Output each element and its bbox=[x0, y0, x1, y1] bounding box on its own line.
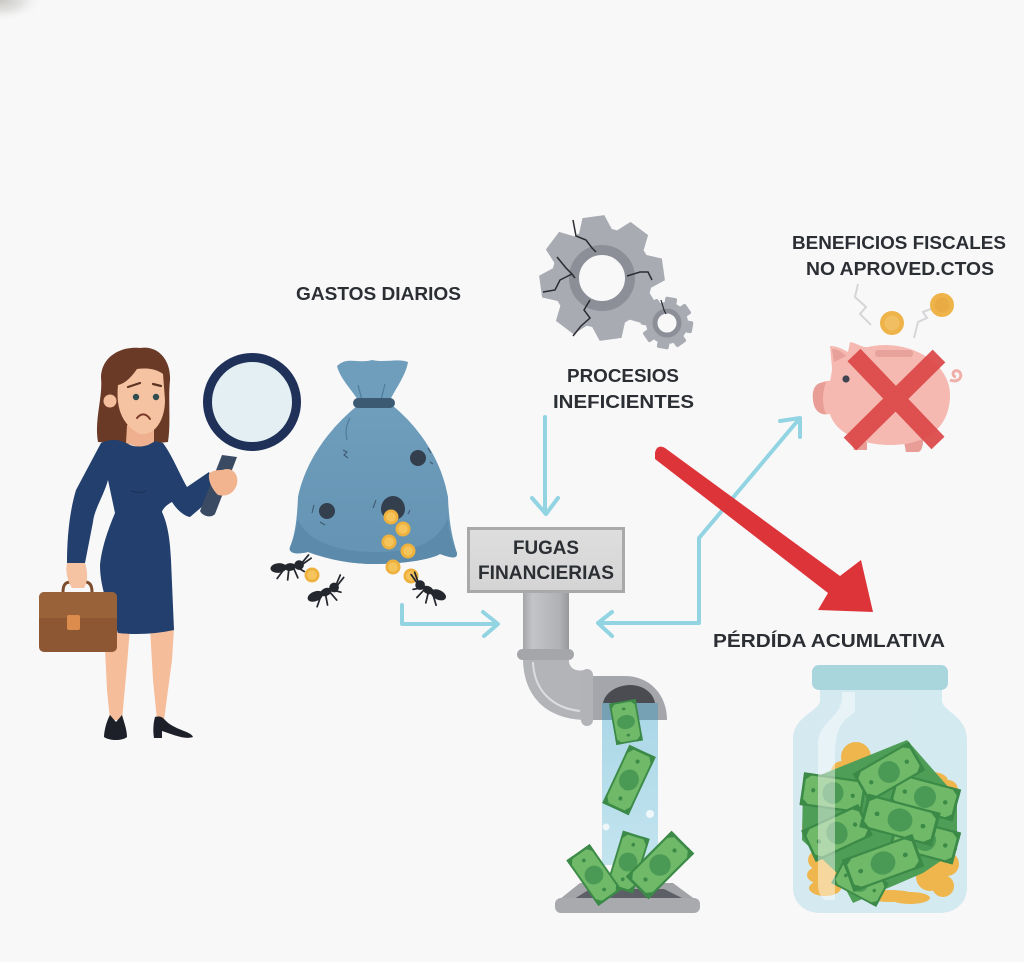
holes bbox=[319, 450, 426, 521]
glass highlight bbox=[818, 692, 855, 900]
hand on briefcase bbox=[66, 563, 87, 588]
icon: piggy bank crossed out bbox=[813, 284, 961, 452]
jar of money bbox=[793, 665, 967, 913]
red cross bbox=[850, 355, 939, 444]
sign: fugas financieras bbox=[468, 528, 624, 592]
hand on magnifier bbox=[209, 469, 237, 496]
woman with magnifying glass and briefcase bbox=[39, 348, 296, 740]
jar glass bbox=[793, 688, 967, 913]
bag body bbox=[290, 406, 457, 564]
shoes bbox=[104, 715, 127, 740]
neck bbox=[126, 425, 154, 448]
ear bbox=[104, 394, 116, 408]
bills in jar bbox=[800, 740, 961, 907]
blue arrow: gastos to pipe bbox=[402, 605, 498, 636]
label: perdida acumulativa: PÉRDÍDA ACUMLATIVA bbox=[713, 630, 945, 651]
icon: leaking money bag with ants bbox=[270, 360, 457, 611]
label: procesos ineficientes: INEFICIENTES bbox=[553, 391, 694, 412]
label: beneficios fiscales: NO APROVED.CTOS bbox=[806, 258, 994, 279]
hair bbox=[97, 348, 170, 445]
heading: gastos diarios: GASTOS DIARIOS bbox=[296, 284, 461, 304]
legs bbox=[104, 628, 174, 720]
dress bbox=[67, 440, 218, 634]
label: beneficios fiscales: BENEFICIOS FISCALES bbox=[792, 232, 1006, 253]
label: procesos ineficientes: PROCESIOS bbox=[567, 365, 679, 386]
drain grate bbox=[555, 883, 700, 913]
eyes and brows bbox=[128, 383, 161, 419]
coins in jar bbox=[802, 742, 959, 904]
large gear bbox=[532, 208, 672, 348]
sign: fugas financieras: FINANCIERIAS bbox=[478, 563, 614, 584]
falling bills bbox=[566, 699, 694, 906]
sign: fugas financieras: FUGAS bbox=[513, 538, 579, 559]
icon: cracked gears bbox=[532, 208, 697, 353]
bubbles bbox=[602, 810, 654, 830]
face bbox=[118, 369, 165, 434]
falling coins bbox=[304, 510, 418, 584]
pipe bbox=[517, 592, 667, 726]
magnifying glass bbox=[200, 358, 296, 516]
water stream bbox=[602, 700, 658, 865]
blue arrow: pipe to piggy bbox=[598, 418, 800, 636]
label: procesos ineficientes bbox=[553, 365, 694, 412]
briefcase bbox=[39, 582, 117, 652]
small gear bbox=[637, 293, 697, 353]
blue arrow: procesos to box bbox=[532, 417, 558, 514]
coins and squiggles bbox=[855, 284, 954, 338]
ants bbox=[270, 555, 450, 611]
lid bbox=[812, 665, 948, 690]
label: beneficios fiscales bbox=[792, 232, 1006, 279]
red arrow bbox=[655, 447, 873, 612]
pig bbox=[847, 432, 923, 452]
